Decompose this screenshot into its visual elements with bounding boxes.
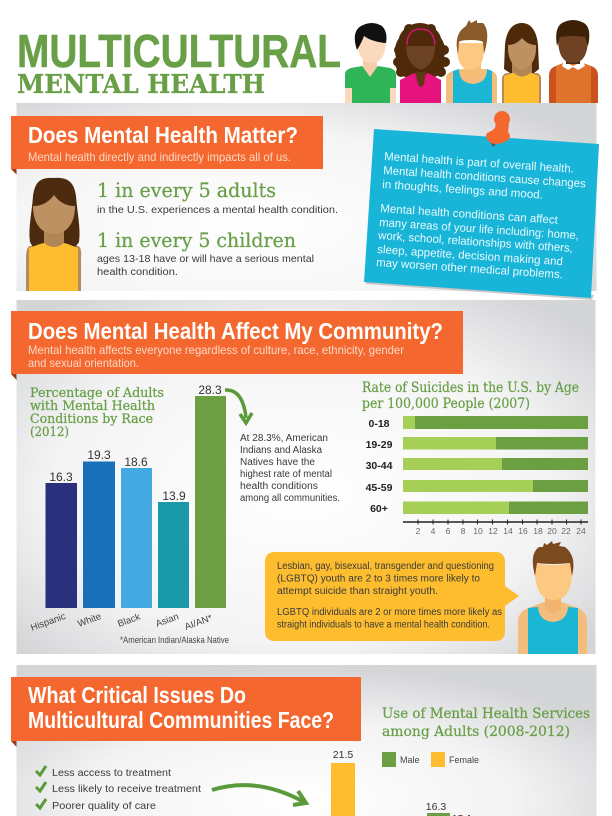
icon: young man xyxy=(518,541,587,654)
person: pink shirt xyxy=(393,23,450,103)
callout: LGBTQ speech bubble: straight individuals to have a mental health condition. xyxy=(277,620,490,630)
banner: critical issues heading: What Critical Issues Do xyxy=(28,682,246,708)
callout: LGBTQ speech bubble: LGBTQ individuals are 2 or more times more likely as xyxy=(277,607,502,618)
legend xyxy=(382,752,479,767)
bar chart: suicides by age: 0-18 xyxy=(368,418,390,430)
bar chart: adults by race: Asian xyxy=(154,611,180,630)
bar chart: suicides by age: 20 xyxy=(547,526,557,536)
banner: critical issues heading xyxy=(11,677,361,747)
stat: children: 1 in every 5 children xyxy=(97,228,296,252)
stat: adults: 1 in every 5 adults xyxy=(97,178,276,202)
callout: sticky note: in thoughts, feelings and mood. xyxy=(382,179,543,202)
chart title: rate of suicides: per 100,000 People (2007) xyxy=(362,396,530,412)
banner: matter heading xyxy=(11,116,323,174)
panel: critical issues xyxy=(11,665,596,816)
bar chart: suicides by age: 24 xyxy=(576,526,586,536)
people group xyxy=(345,20,598,103)
bar chart: adults by race: 16.3 xyxy=(49,470,73,484)
stat: children xyxy=(97,228,314,278)
arrow: to service chart xyxy=(212,785,306,805)
bar chart: adults by race: 28.3 xyxy=(198,383,222,397)
list: issues: Poorer quality of care xyxy=(52,800,156,812)
callout: LGBTQ speech bubble: attempt suicide than straight youth. xyxy=(277,586,438,597)
bar chart: service use xyxy=(331,749,472,816)
bar chart: adults by race: AI/AN* xyxy=(183,613,214,633)
banner: community heading: Mental health affects everyone regardless of culture, race, ethnicity, gender xyxy=(28,343,404,357)
stat: children: health condition. xyxy=(97,266,178,278)
banner: matter heading: Mental health directly and indirectly impacts all of us. xyxy=(28,150,291,164)
icon: woman xyxy=(26,178,81,291)
bar chart: suicides by age: 2 xyxy=(416,526,421,536)
banner: community heading: and sexual orientation. xyxy=(28,356,139,370)
panel: does mental health matter xyxy=(11,103,596,291)
bar chart: suicides by age: 10 xyxy=(473,526,483,536)
stat: adults: in the U.S. experiences a mental health condition. xyxy=(97,204,338,216)
arrow: to AI/AN note xyxy=(225,390,252,423)
chart title: use of services xyxy=(382,706,590,740)
bar chart: service use: 16.3 xyxy=(426,801,446,813)
text: AI/AN note: among all communities. xyxy=(240,493,340,504)
callout: sticky note: work, school, relationships with others, xyxy=(377,230,573,255)
callout: LGBTQ speech bubble: (LGBTQ) youth are 2 to 3 times more likely to xyxy=(277,574,480,584)
list: issues: Less access to treatment xyxy=(52,767,171,779)
bar chart: service use: 21.5 xyxy=(333,749,353,761)
bar chart: suicides by age: 19-29 xyxy=(366,439,393,451)
callout: sticky note: Mental health is part of overall health. xyxy=(384,151,574,176)
callout: sticky note xyxy=(364,111,599,300)
bar chart: adults by race: Black xyxy=(116,611,142,630)
callout: LGBTQ speech bubble xyxy=(265,552,519,641)
callout: sticky note: Mental health conditions can affect xyxy=(380,203,559,227)
chart title: use of services: among Adults (2008-2012) xyxy=(382,724,570,740)
bar chart: suicides by age: 16 xyxy=(518,526,528,536)
bar chart: suicides by age: 18 xyxy=(533,526,543,536)
bar chart: adults by race: White xyxy=(76,611,103,630)
banner: community heading: Does Mental Health Affect My Community? xyxy=(28,318,443,344)
text: AI/AN note: Natives have the xyxy=(240,457,315,468)
chart title: percentage of adults: Percentage of Adults xyxy=(30,386,164,401)
legend: Female xyxy=(449,755,479,765)
bar chart: adults by race: 13.9 xyxy=(162,489,186,503)
text: AI/AN note: Indians and Alaska xyxy=(240,445,322,456)
callout: LGBTQ speech bubble: Lesbian, gay, bisexual, transgender and questioning xyxy=(277,561,494,572)
callout: sticky note: may worsen other medical problems. xyxy=(376,257,563,281)
person: green shirt xyxy=(345,23,396,103)
bar chart: suicides by age: 60+ xyxy=(370,503,388,515)
banner: critical issues heading: Multicultural Communities Face? xyxy=(28,707,334,733)
text: AI/AN note xyxy=(240,433,340,504)
banner: matter heading: Does Mental Health Matter? xyxy=(28,122,298,148)
chart title: rate of suicides xyxy=(362,380,579,412)
bar chart: suicides by age: 4 xyxy=(431,526,436,536)
callout: sticky note: sleep, appetite, decision making and xyxy=(377,244,563,268)
bar chart: adults by race: *American Indian/Alaska Native xyxy=(120,635,229,645)
stat: adults xyxy=(97,178,338,216)
stat: children: ages 13-18 have or will have a serious mental xyxy=(97,253,314,265)
text: AI/AN note: health conditions xyxy=(240,481,318,492)
list: issues: Less likely to receive treatment xyxy=(52,783,201,795)
text: AI/AN note: highest rate of mental xyxy=(240,469,332,480)
legend: Male xyxy=(400,755,420,765)
bar chart: suicides by age: 12 xyxy=(488,526,498,536)
callout: sticky note: Mental health conditions cause changes xyxy=(383,165,586,190)
chart title: percentage of adults: Conditions by Race xyxy=(30,412,153,427)
text: AI/AN note: At 28.3%, American xyxy=(240,433,328,444)
person: orange sweater xyxy=(549,20,598,103)
panel: does mental health affect my community xyxy=(11,300,596,654)
bar chart: suicides by age: 30-44 xyxy=(366,460,393,472)
bar chart: suicides by age: 6 xyxy=(446,526,451,536)
chart title: rate of suicides: Rate of Suicides in the U.S. by Age xyxy=(362,380,579,396)
title: MENTAL HEALTH xyxy=(17,70,265,100)
title xyxy=(17,25,341,100)
chart title: percentage of adults: (2012) xyxy=(30,425,69,440)
person: yellow shirt xyxy=(502,23,541,103)
callout: sticky note: many areas of your life including: home, xyxy=(379,217,579,242)
bar chart: adults by race: Hispanic xyxy=(29,611,67,634)
chart title: percentage of adults xyxy=(30,386,164,440)
bar chart: adults by race: 18.6 xyxy=(124,455,148,469)
bar chart: suicides by age: 22 xyxy=(561,526,571,536)
list: issues xyxy=(36,766,201,812)
icon: push pin xyxy=(486,111,510,147)
person: cyan tank xyxy=(446,20,497,103)
bar chart: adults by race: 19.3 xyxy=(87,448,111,462)
bar chart: suicides by age xyxy=(366,416,588,536)
bar chart: suicides by age: 8 xyxy=(461,526,466,536)
banner: community heading xyxy=(11,311,463,380)
title: MULTICULTURAL xyxy=(17,25,341,77)
chart title: percentage of adults: with Mental Health xyxy=(30,399,156,414)
bar chart: suicides by age: 45-59 xyxy=(366,482,393,494)
bar chart: adults by race xyxy=(29,383,229,645)
bar chart: suicides by age: 14 xyxy=(503,526,513,536)
chart title: use of services: Use of Mental Health Services xyxy=(382,706,590,722)
